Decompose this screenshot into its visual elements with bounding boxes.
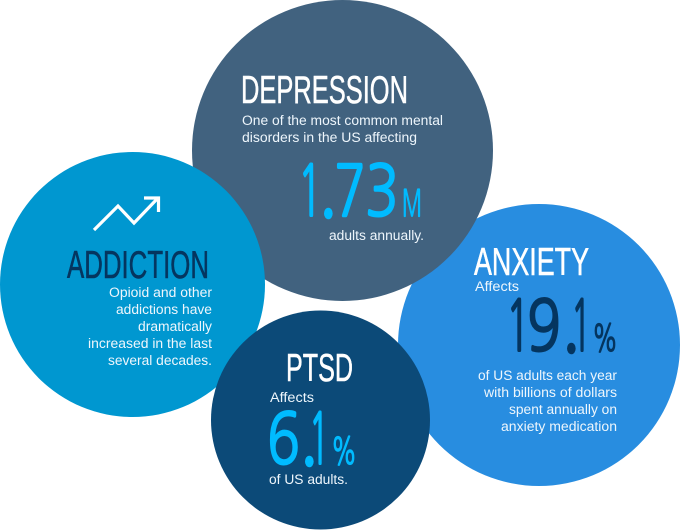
text: anxiety description: of US adults each year	[478, 368, 618, 383]
stat: 1.73M: .	[320, 155, 336, 225]
text: addiction description	[88, 285, 213, 368]
panel: anxiety circle	[398, 204, 680, 486]
addiction content	[67, 198, 213, 368]
text: depression description: One of the most common mental	[242, 113, 443, 128]
panel: ptsd circle	[211, 310, 430, 530]
stat: 1.73M: 1	[298, 157, 322, 227]
stat: 19.1%: .	[563, 290, 579, 360]
text: anxiety description: anxiety medication	[501, 419, 617, 434]
stat: 19.1%: 9	[527, 292, 561, 362]
stat: 6.1%: 1	[309, 405, 329, 475]
text: of us adults: of US adults.	[269, 472, 348, 487]
panel: addiction circle	[0, 152, 265, 417]
text: anxiety description: spent annually on	[509, 402, 617, 417]
text: depression description	[242, 113, 443, 145]
text: addiction description: increased in the last	[88, 336, 212, 351]
stat: 1.73M: 3	[365, 157, 399, 227]
text: anxiety description: with billions of dollars	[483, 385, 617, 400]
anxiety content	[474, 241, 618, 434]
stat: 1.73M: 7	[334, 157, 366, 227]
text: affects: Affects	[475, 279, 519, 294]
depression content	[241, 69, 443, 243]
text: addiction description: several decades.	[108, 353, 212, 368]
stat: 1.73M	[298, 155, 422, 227]
ptsd content	[267, 347, 357, 487]
stat: 19.1%: 1	[571, 292, 591, 362]
text: adults annually: adults annually.	[329, 228, 424, 243]
text: addiction description: dramatically	[138, 319, 212, 334]
text: affects: Affects	[270, 390, 314, 405]
stat: 1.73M: M	[402, 186, 422, 222]
stat: 19.1%: %	[592, 320, 618, 358]
panel: depression circle	[192, 0, 493, 301]
stat: 6.1%	[267, 403, 357, 475]
stat: 6.1%: .	[301, 403, 317, 473]
text: depression description: disorders in the US affecting	[242, 130, 417, 145]
stat: 6.1%: 6	[267, 405, 300, 475]
heading: depression: DEPRESSION	[241, 69, 408, 112]
text: addiction description: Opioid and other	[109, 285, 213, 300]
icon: rising trend arrow	[94, 198, 158, 230]
heading: anxiety: ANXIETY	[474, 241, 589, 284]
stat: 6.1%: %	[331, 434, 357, 470]
stat: 19.1%	[506, 290, 618, 362]
text: addiction description: addictions have	[116, 302, 212, 317]
heading: addiction: ADDICTION	[67, 244, 209, 287]
stat: 19.1%: 1	[506, 292, 530, 362]
heading: ptsd: PTSD	[286, 347, 353, 390]
text: anxiety description	[478, 368, 618, 434]
